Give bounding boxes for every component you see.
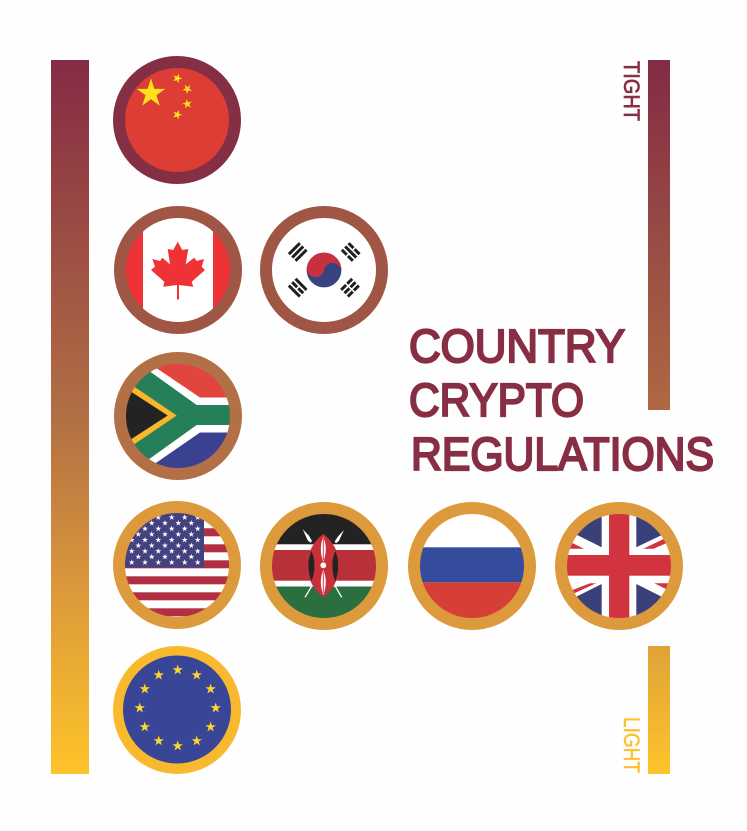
left gradient scale bar xyxy=(51,60,89,774)
flag: China xyxy=(119,62,235,178)
flag: Canada xyxy=(120,212,236,328)
title: COUNTRY xyxy=(409,320,625,372)
title: CRYPTO xyxy=(409,374,584,426)
flag: Russia xyxy=(414,508,530,624)
label: light: LIGHT xyxy=(619,717,644,773)
flag: United Kingdom xyxy=(555,502,683,630)
flag: United States xyxy=(119,507,235,623)
title: REGULATIONS xyxy=(411,428,714,480)
right scale bar: light end xyxy=(648,646,670,774)
right scale bar: tight end xyxy=(648,60,670,410)
label: tight: TIGHT xyxy=(619,61,644,121)
flag: South Korea xyxy=(266,212,382,328)
flag: South Africa xyxy=(120,350,236,480)
title xyxy=(409,320,714,480)
flag: European Union xyxy=(113,646,241,774)
flag: Kenya xyxy=(266,508,382,624)
